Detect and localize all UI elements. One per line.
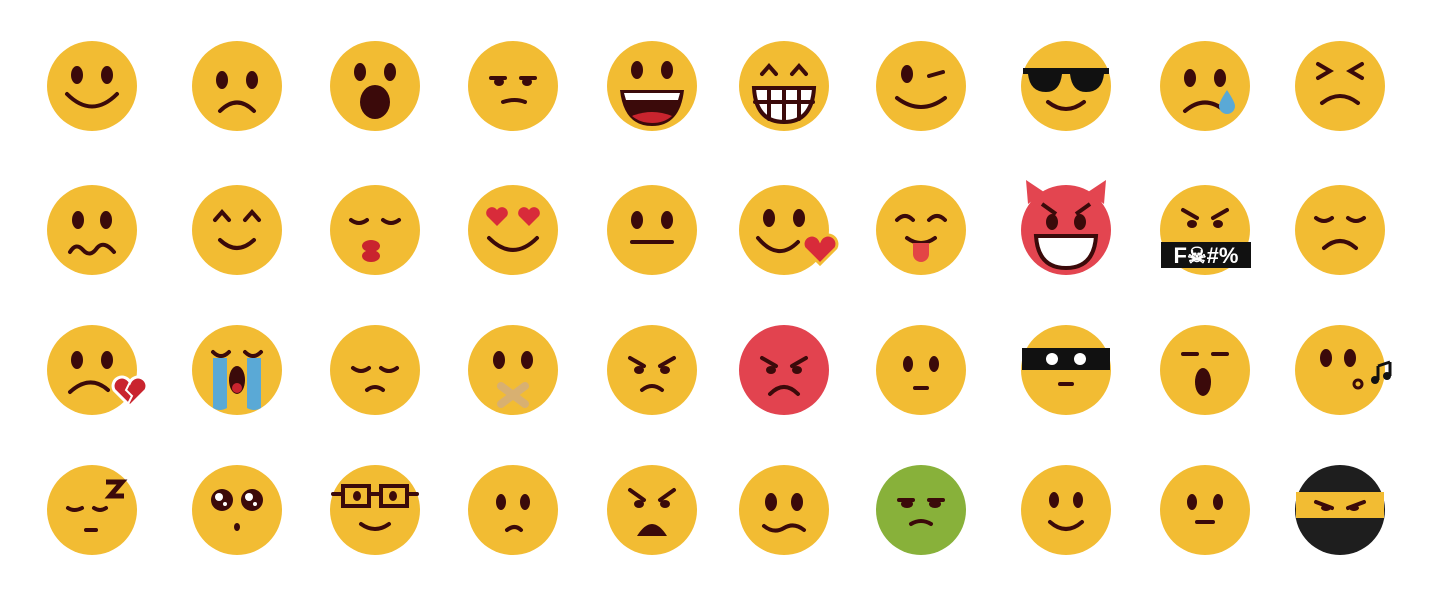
emoji: sunglasses — [1021, 41, 1111, 131]
emoji: big grin — [607, 41, 697, 131]
emoji: smile — [47, 41, 137, 131]
emoji: wavy mouth — [739, 465, 829, 555]
row 2 — [47, 180, 1385, 275]
row 4 — [47, 465, 1385, 555]
emoji: devil — [1021, 180, 1111, 275]
row 3 — [47, 325, 1391, 415]
emoji: wink — [876, 41, 966, 131]
emoji: nerd glasses — [330, 465, 420, 555]
emoji: whistling music — [1295, 325, 1391, 415]
emoji: worried wavy — [47, 185, 137, 275]
emoji: open mouth — [330, 41, 420, 131]
emoji: angry shout — [607, 465, 697, 555]
emoji: cursing: F☠#% — [1174, 243, 1238, 268]
emoji: sleeping — [47, 465, 137, 555]
emoji: grimace grin — [739, 41, 829, 131]
emoji: ninja — [1295, 465, 1385, 555]
emoji: annoyed — [607, 325, 697, 415]
emoji: bandit mask — [1021, 325, 1111, 415]
emoji: confused — [468, 465, 558, 555]
emoji: sick green — [876, 465, 966, 555]
emoji: blow kiss heart — [739, 185, 837, 275]
emoji: tongue out — [876, 185, 966, 275]
emoji: unamused — [468, 41, 558, 131]
emoji: frown — [192, 41, 282, 131]
emoji: happy closed eyes — [192, 185, 282, 275]
emoji: broken heart — [47, 325, 147, 415]
row 1 — [47, 41, 1385, 131]
emoji: slight smile — [1021, 465, 1111, 555]
emoji: slight neutral — [876, 325, 966, 415]
emoji: heart eyes — [468, 185, 558, 275]
emoji: pensive — [330, 325, 420, 415]
emoji: cursing — [1160, 185, 1251, 275]
emoji: sad squint — [1295, 185, 1385, 275]
emoji: big eyes — [192, 465, 282, 555]
emoji: crying tear — [1160, 41, 1250, 131]
emoji: straight face — [1160, 465, 1250, 555]
emoji: neutral — [607, 185, 697, 275]
emoji: angry red — [739, 325, 829, 415]
emoji: kiss — [330, 185, 420, 275]
emoji: taped mouth — [468, 325, 558, 415]
emoji: squint frown — [1295, 41, 1385, 131]
emoji: loudly crying — [192, 325, 282, 415]
emoji: yawn — [1160, 325, 1250, 415]
